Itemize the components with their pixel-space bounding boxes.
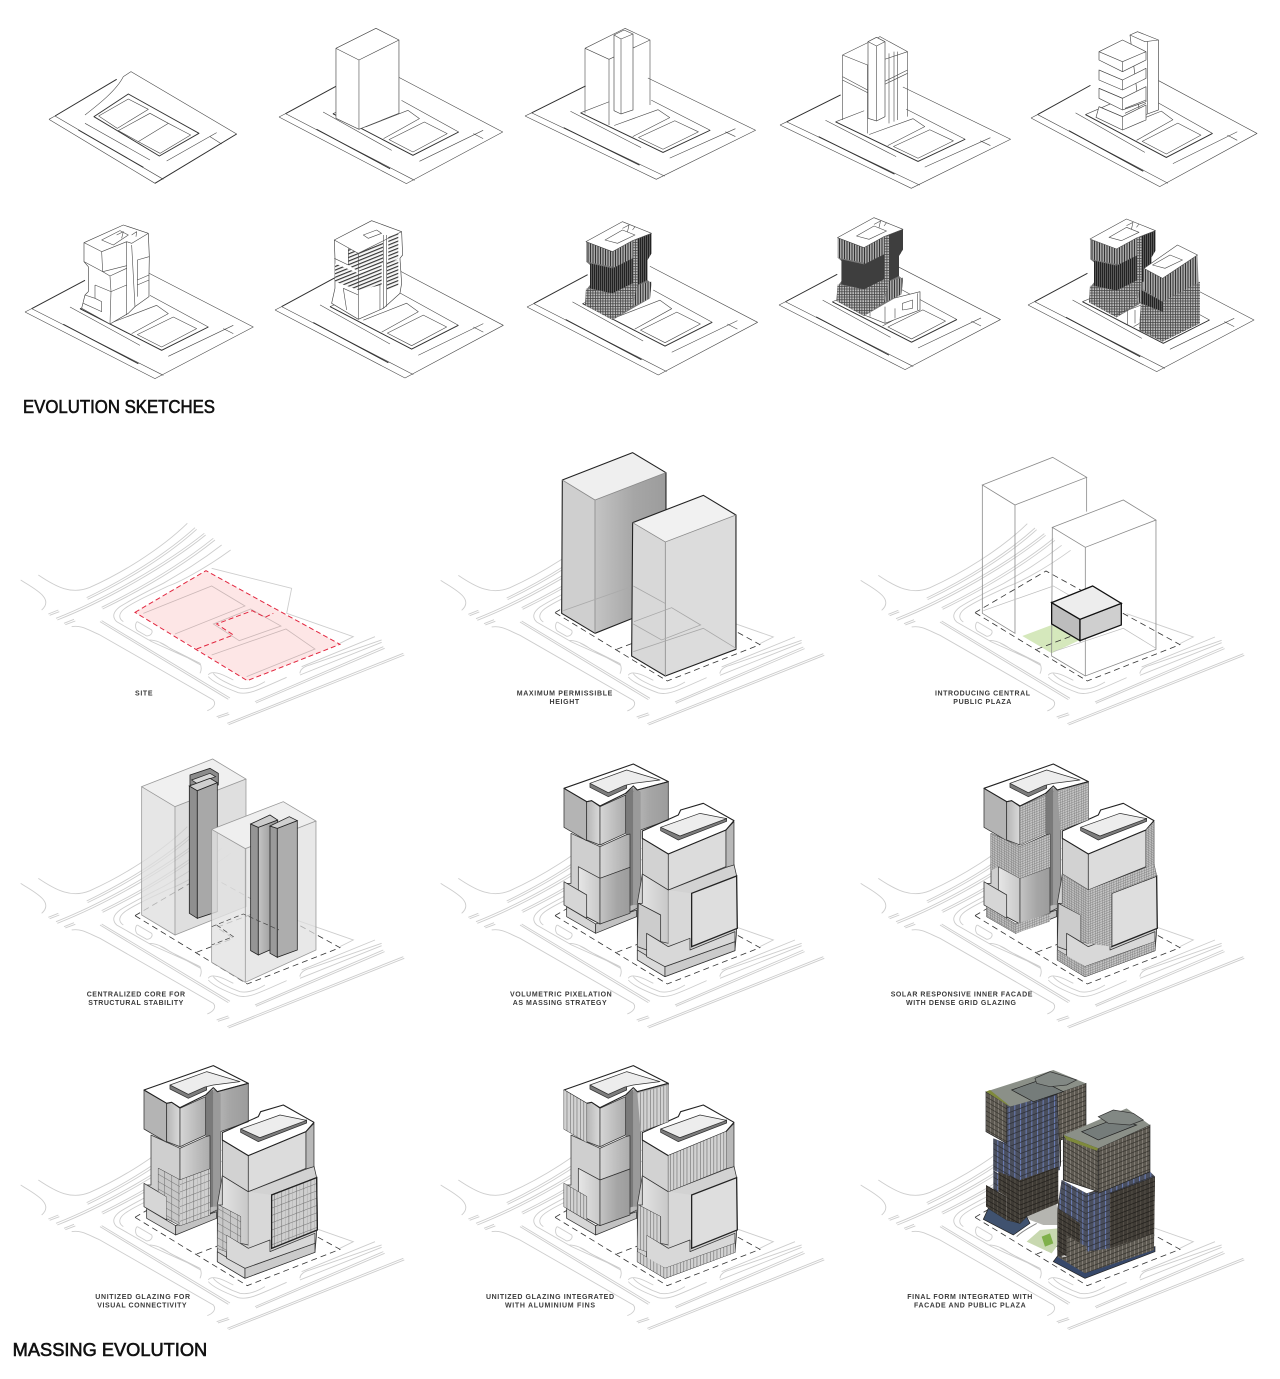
sketch 2: tower box xyxy=(279,28,503,184)
sketch 9: tower with podium xyxy=(779,218,1000,370)
panel: maximum permissible height xyxy=(441,453,824,725)
caption xyxy=(486,1294,614,1309)
site plan with red plot xyxy=(21,523,404,725)
caption: INTRODUCING CENTRAL xyxy=(935,691,1031,698)
panel: aluminium fins xyxy=(441,1066,824,1330)
towers with dense inner grid xyxy=(861,764,1244,1028)
caption: FACADE AND PUBLIC PLAZA xyxy=(914,1302,1026,1309)
sketch 4: tower with floor cuts xyxy=(780,37,1011,188)
heading: massing evolution: MASSING EVOLUTION xyxy=(13,1340,207,1360)
caption: HEIGHT xyxy=(550,699,580,706)
panel: site xyxy=(21,523,404,725)
caption: AS MASSING STRATEGY xyxy=(513,1000,607,1007)
sketch 6: pixelated massing xyxy=(25,225,253,379)
towers with vertical fins xyxy=(441,1066,824,1330)
caption: UNITIZED GLAZING FOR xyxy=(95,1294,190,1301)
caption: FINAL FORM INTEGRATED WITH xyxy=(907,1294,1032,1301)
sketch 3: tower with core xyxy=(525,28,756,179)
wireframe towers with plaza block xyxy=(861,457,1244,725)
caption: SITE xyxy=(135,690,153,698)
translucent towers with cores xyxy=(21,759,404,1028)
heading: evolution sketches: EVOLUTION SKETCHES xyxy=(23,397,215,417)
pixelated towers xyxy=(441,764,824,1028)
panel: evolution sketches xyxy=(25,28,1257,379)
towers at maximum height xyxy=(441,453,824,725)
panel: unitized glazing xyxy=(21,1066,404,1330)
caption: VOLUMETRIC PIXELATION xyxy=(510,992,612,999)
caption: MAXIMUM PERMISSIBLE xyxy=(517,691,613,698)
caption xyxy=(891,992,1033,1007)
panel: volumetric pixelation xyxy=(441,764,824,1028)
panel: central public plaza xyxy=(861,457,1244,725)
sketch 7: horizontal hatching xyxy=(275,221,503,378)
caption xyxy=(87,992,185,1007)
caption: UNITIZED GLAZING INTEGRATED xyxy=(486,1294,614,1301)
sketch 5: stacked volumes xyxy=(1031,32,1257,187)
sketch 1: empty site xyxy=(49,72,237,183)
caption xyxy=(510,992,612,1007)
caption xyxy=(95,1294,190,1309)
caption: VISUAL CONNECTIVITY xyxy=(97,1302,187,1309)
caption xyxy=(517,691,613,706)
caption: PUBLIC PLAZA xyxy=(953,699,1011,706)
caption: WITH ALUMINIUM FINS xyxy=(505,1302,595,1309)
final rendered towers and plaza xyxy=(861,1070,1244,1330)
panel: final form xyxy=(861,1070,1244,1330)
panel: solar responsive facade xyxy=(861,764,1244,1028)
towers with unitized glazing panels xyxy=(21,1066,404,1330)
caption xyxy=(907,1294,1032,1309)
caption: WITH DENSE GRID GLAZING xyxy=(906,1000,1017,1007)
caption xyxy=(935,691,1031,706)
sketch 10: two towers xyxy=(1028,219,1254,372)
caption: SOLAR RESPONSIVE INNER FACADE xyxy=(891,992,1033,999)
sketch 8: tower with facade texture xyxy=(527,222,758,375)
panel: centralized core xyxy=(21,759,404,1028)
caption: CENTRALIZED CORE FOR xyxy=(87,992,185,999)
caption: STRUCTURAL STABILITY xyxy=(88,1000,184,1007)
